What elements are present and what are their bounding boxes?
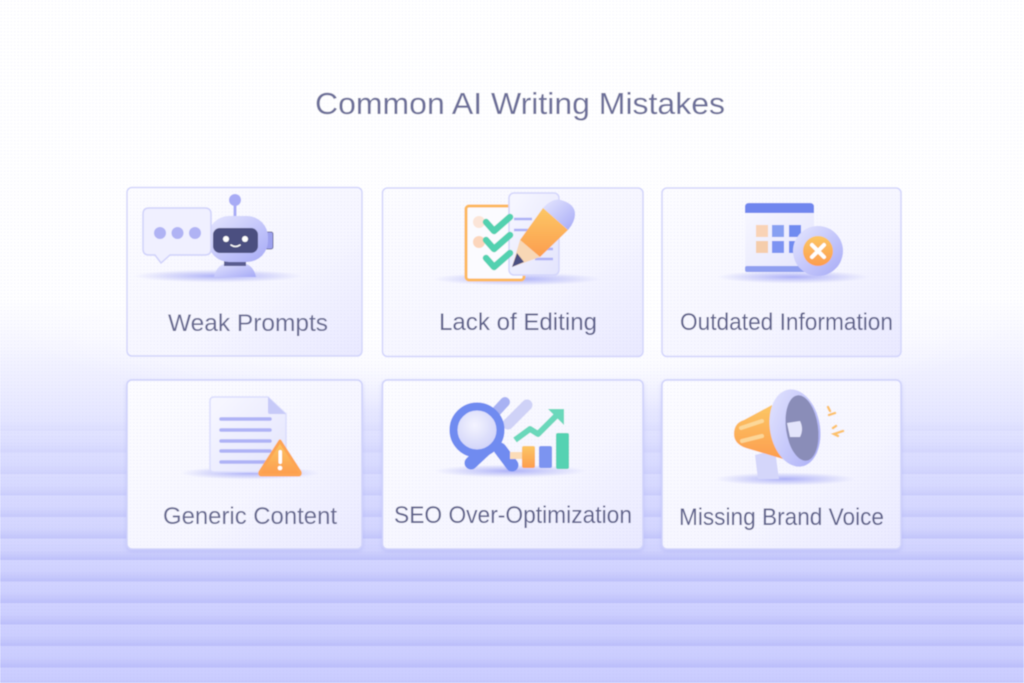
icon: calendar with error badge — [745, 203, 843, 276]
title: Common AI Writing Mistakes — [315, 86, 725, 121]
label: Weak Prompts — [168, 310, 328, 337]
panel: SEO Over-Optimization — [382, 380, 643, 549]
panel: Generic Content — [127, 380, 362, 549]
panel: Outdated Information — [662, 188, 901, 356]
label: SEO Over-Optimization — [394, 502, 632, 529]
icon: megaphone — [734, 385, 843, 479]
label: Lack of Editing — [439, 309, 597, 336]
icon: robot with speech bubble — [143, 194, 273, 277]
icon: magnifier and growth chart — [454, 402, 569, 469]
label: Missing Brand Voice — [679, 504, 884, 531]
icon: document with warning — [210, 397, 300, 475]
icon: checklist and pencil — [466, 193, 575, 280]
panel: Lack of Editing — [382, 188, 643, 356]
panel: Missing Brand Voice — [662, 380, 901, 549]
label: Outdated Information — [680, 309, 893, 336]
panel: Weak Prompts — [127, 188, 362, 356]
label: Generic Content — [163, 503, 337, 530]
